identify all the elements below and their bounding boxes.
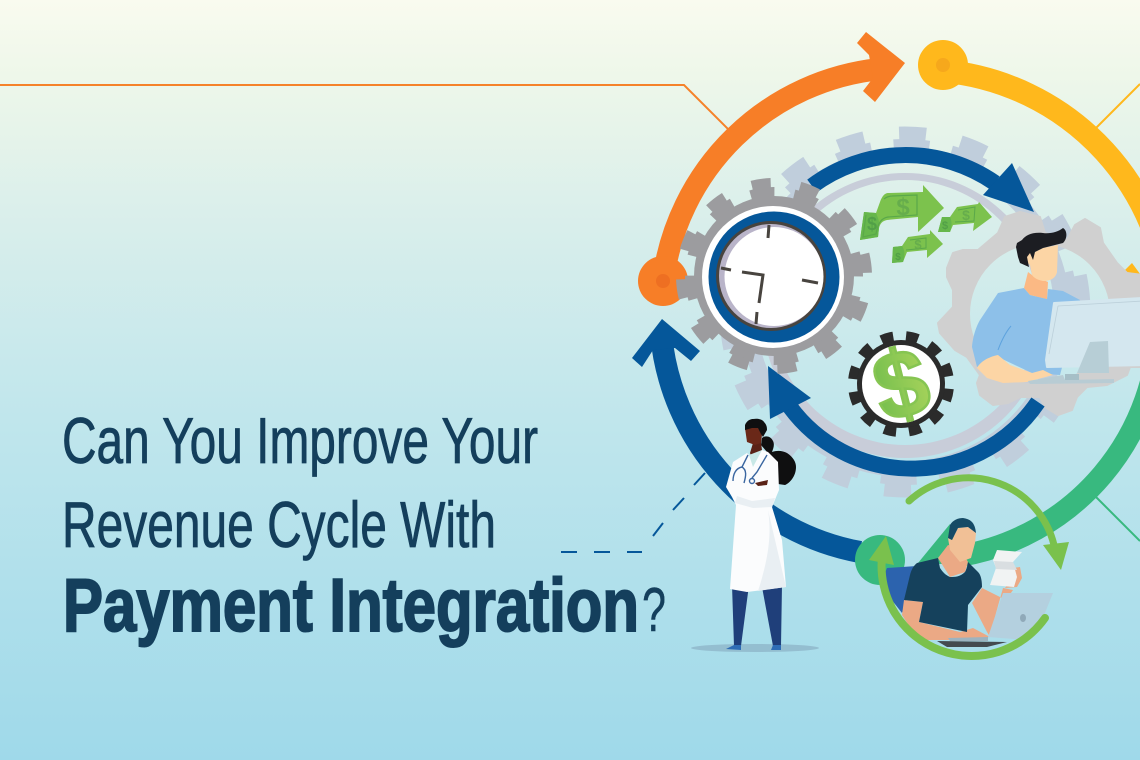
large money arrow — [860, 185, 944, 240]
question mark: ? — [642, 576, 666, 645]
orange connector line — [0, 85, 728, 129]
laptop — [988, 593, 1053, 640]
small money arrow right: $ — [942, 220, 948, 232]
yellow connector line — [1096, 84, 1140, 128]
title line 1: Can You Improve Your — [62, 404, 538, 477]
hair — [948, 518, 976, 540]
shirt — [904, 558, 982, 632]
sleeve crease — [998, 326, 1011, 350]
large money arrow: $ — [896, 194, 910, 221]
shirt — [972, 288, 1080, 375]
gray gear — [938, 212, 1140, 415]
dollar sign: $ — [863, 327, 940, 443]
forearm — [977, 355, 1053, 383]
monitor — [1046, 298, 1140, 367]
hair — [745, 419, 767, 437]
ponytail — [761, 436, 796, 485]
large money arrow: $ — [867, 214, 877, 234]
keyboard base — [1028, 375, 1114, 384]
lower blue cycle arrow — [768, 366, 1038, 469]
outer yellow cycle arc — [918, 40, 1140, 320]
title — [62, 404, 666, 647]
doctor figure — [691, 419, 819, 652]
title line 2: Revenue Cycle With — [62, 488, 496, 561]
blue dashed connector — [561, 473, 705, 552]
legs — [732, 585, 782, 646]
dollar gear — [850, 327, 952, 443]
green cycle node — [855, 535, 905, 585]
outer orange cycle arrow — [638, 32, 905, 306]
left arm — [902, 600, 990, 640]
green connector line — [1096, 497, 1140, 541]
face — [745, 427, 762, 445]
outer blue cycle arrow — [632, 319, 860, 552]
chair — [880, 566, 917, 613]
paper — [990, 550, 1022, 587]
small money arrow lower: $ — [895, 252, 901, 263]
shoes — [726, 645, 781, 650]
neck — [750, 443, 762, 458]
small money arrow right: $ — [962, 207, 970, 223]
monitor bezel line — [1049, 301, 1140, 354]
upper blue cycle arrow — [812, 155, 1034, 212]
right arm — [972, 588, 1013, 637]
clock ticks and hands — [721, 225, 818, 324]
face — [1030, 245, 1058, 281]
neck — [938, 545, 968, 577]
small money arrow right — [938, 202, 992, 232]
laptop base — [937, 641, 1007, 647]
coat collar — [749, 450, 762, 467]
green loop arrow bottom — [869, 536, 1045, 656]
clock face — [724, 227, 824, 326]
hand — [755, 480, 768, 486]
stethoscope — [733, 455, 767, 484]
neck — [1024, 272, 1048, 299]
ground shadow — [691, 644, 819, 652]
hand — [1005, 567, 1022, 588]
face — [948, 527, 976, 562]
hair — [1016, 228, 1066, 267]
person at computer with gear — [938, 212, 1140, 415]
outer green cycle arc — [918, 320, 1140, 565]
title line 3: Payment Integration — [63, 563, 639, 647]
small money arrow lower — [892, 230, 943, 263]
green loop arrow top — [909, 478, 1069, 570]
monitor stand — [1077, 341, 1109, 373]
coat shading — [735, 496, 786, 591]
clock gear — [659, 161, 889, 391]
man at laptop — [869, 478, 1069, 656]
large pale gear — [703, 110, 1107, 514]
small money arrow lower: $ — [914, 237, 922, 252]
stand block — [1065, 374, 1079, 380]
ear — [1027, 253, 1035, 265]
lab coat — [726, 450, 786, 592]
